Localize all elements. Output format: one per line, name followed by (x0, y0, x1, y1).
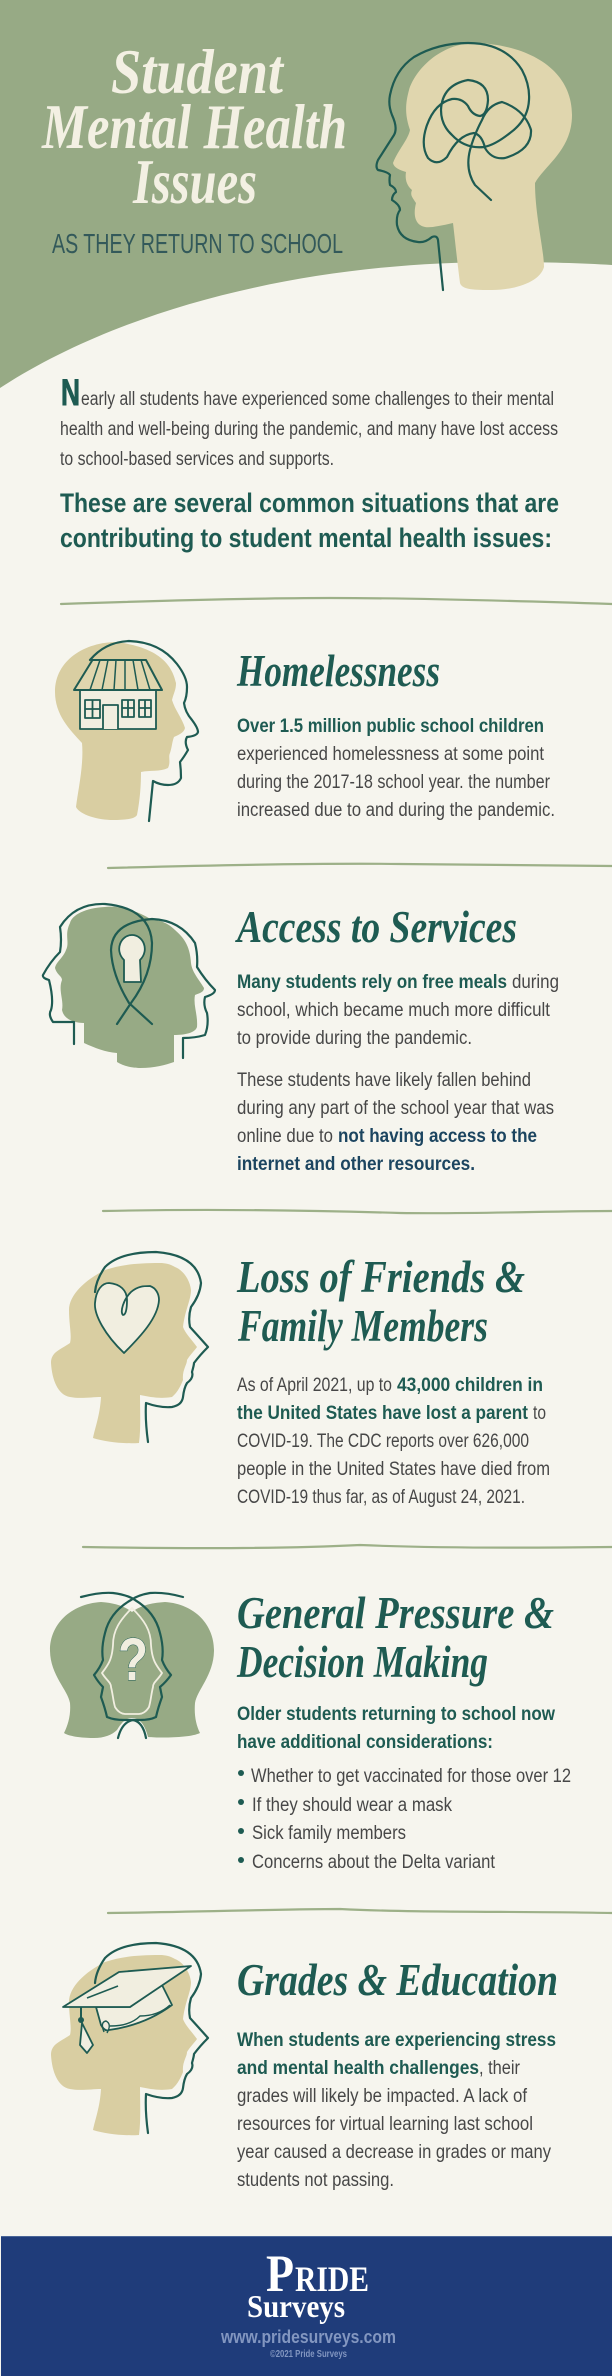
title: Issues (132, 146, 257, 217)
panel: access to services (43, 902, 559, 1175)
panel: header (0, 0, 612, 388)
text block (237, 972, 559, 1175)
icon: two facing heads with question mark: ? (118, 1626, 148, 1693)
panel: footer (1, 2236, 612, 2376)
copyright: ©2021 Pride Surveys (270, 2349, 347, 2360)
bullet list: Whether to get vaccinated for those over 12 (251, 1766, 571, 1787)
text block: year caused a decrease in grades or many (237, 2142, 551, 2163)
text block: students not passing. (237, 2170, 394, 2191)
icon: two facing heads with question mark (50, 1593, 214, 1738)
text block: the United States have lost a parent (237, 1403, 529, 1424)
logo: Pride Surveys (247, 2245, 369, 2324)
panel: grades and education (51, 1943, 558, 2191)
heading: Access to Services (234, 902, 517, 952)
text block: and mental health challenges (237, 2058, 479, 2079)
bullet list: If they should wear a mask (252, 1795, 452, 1816)
heading: Homelessness (236, 646, 440, 696)
text block: Older students returning to school now (237, 1704, 555, 1725)
text block: COVID-19 thus far, as of August 24, 2021. (237, 1487, 525, 1508)
text block (237, 1704, 555, 1753)
icon: head with tangled thoughts (376, 43, 572, 290)
text block: experienced homelessness at some point (237, 744, 545, 765)
icon: head with house (55, 641, 198, 821)
text block: during the 2017-18 school year. the number (237, 772, 551, 793)
text block (237, 2030, 556, 2191)
text block: 43,000 children in (397, 1375, 543, 1396)
icon: head with graduation cap (51, 1943, 208, 2135)
logo: Pride Surveys: RIDE (295, 2259, 369, 2299)
text block: during any part of the school year that was (237, 1098, 554, 1119)
title (41, 36, 347, 217)
heading: Loss of Friends & (236, 1252, 525, 1302)
text block: As of April 2021, up to (237, 1375, 392, 1396)
text block: to (533, 1403, 546, 1424)
icon: head with heart (51, 1252, 208, 1443)
text block: Over 1.5 million public school children (237, 716, 544, 737)
text block: during (512, 972, 559, 993)
drop cap and intro paragraph: N (61, 372, 80, 413)
text block: Many students rely on free meals (237, 972, 507, 993)
heading (236, 1588, 554, 1687)
website: www.pridesurveys.com (220, 2327, 396, 2347)
text block: people in the United States have died from (237, 1459, 550, 1480)
text block (237, 1375, 550, 1508)
bullet list: Concerns about the Delta variant (252, 1852, 496, 1873)
panel: introduction (60, 372, 559, 553)
subheading (60, 488, 559, 553)
text block: not having access to the (338, 1126, 537, 1147)
text block: These students have likely fallen behind (237, 1070, 531, 1091)
heading: General Pressure & (237, 1588, 554, 1638)
text block: resources for virtual learning last school (237, 2114, 533, 2135)
title: Student (111, 36, 285, 107)
title: Mental Health (41, 91, 347, 162)
subtitle: AS THEY RETURN TO SCHOOL (52, 228, 343, 259)
heading (236, 1252, 525, 1351)
panel: loss of friends and family (51, 1252, 550, 1508)
logo: Pride Surveys: Surveys (247, 2288, 345, 2324)
text block: to provide during the pandemic. (237, 1028, 472, 1049)
text block: When students are experiencing stress (237, 2030, 556, 2051)
heading: Decision Making (236, 1637, 488, 1687)
logo: Pride Surveys: P (266, 2245, 294, 2303)
drop cap and intro paragraph (60, 372, 558, 470)
text block: online due to (237, 1126, 333, 1147)
bullet list: Sick family members (252, 1823, 406, 1844)
text block: , their (479, 2058, 521, 2079)
heading: Family Members (237, 1301, 488, 1351)
text block (237, 716, 555, 821)
bullet list (238, 1766, 571, 1873)
text block: school, which became much more difficult (237, 1000, 551, 1021)
text block: grades will likely be impacted. A lack of (237, 2086, 528, 2107)
text block: have additional considerations: (237, 1732, 493, 1753)
text block: COVID-19. The CDC reports over 626,000 (237, 1431, 529, 1452)
panel: homelessness (55, 641, 555, 821)
text block: increased due to and during the pandemic. (237, 800, 555, 821)
heading: Grades & Education (237, 1955, 558, 2005)
panel: general pressure and decision making (50, 1588, 571, 1873)
drop cap and intro paragraph: to school-based services and supports. (60, 449, 334, 470)
text block: internet and other resources. (237, 1154, 475, 1175)
icon: two heads with keyhole ribbon (43, 904, 215, 1068)
